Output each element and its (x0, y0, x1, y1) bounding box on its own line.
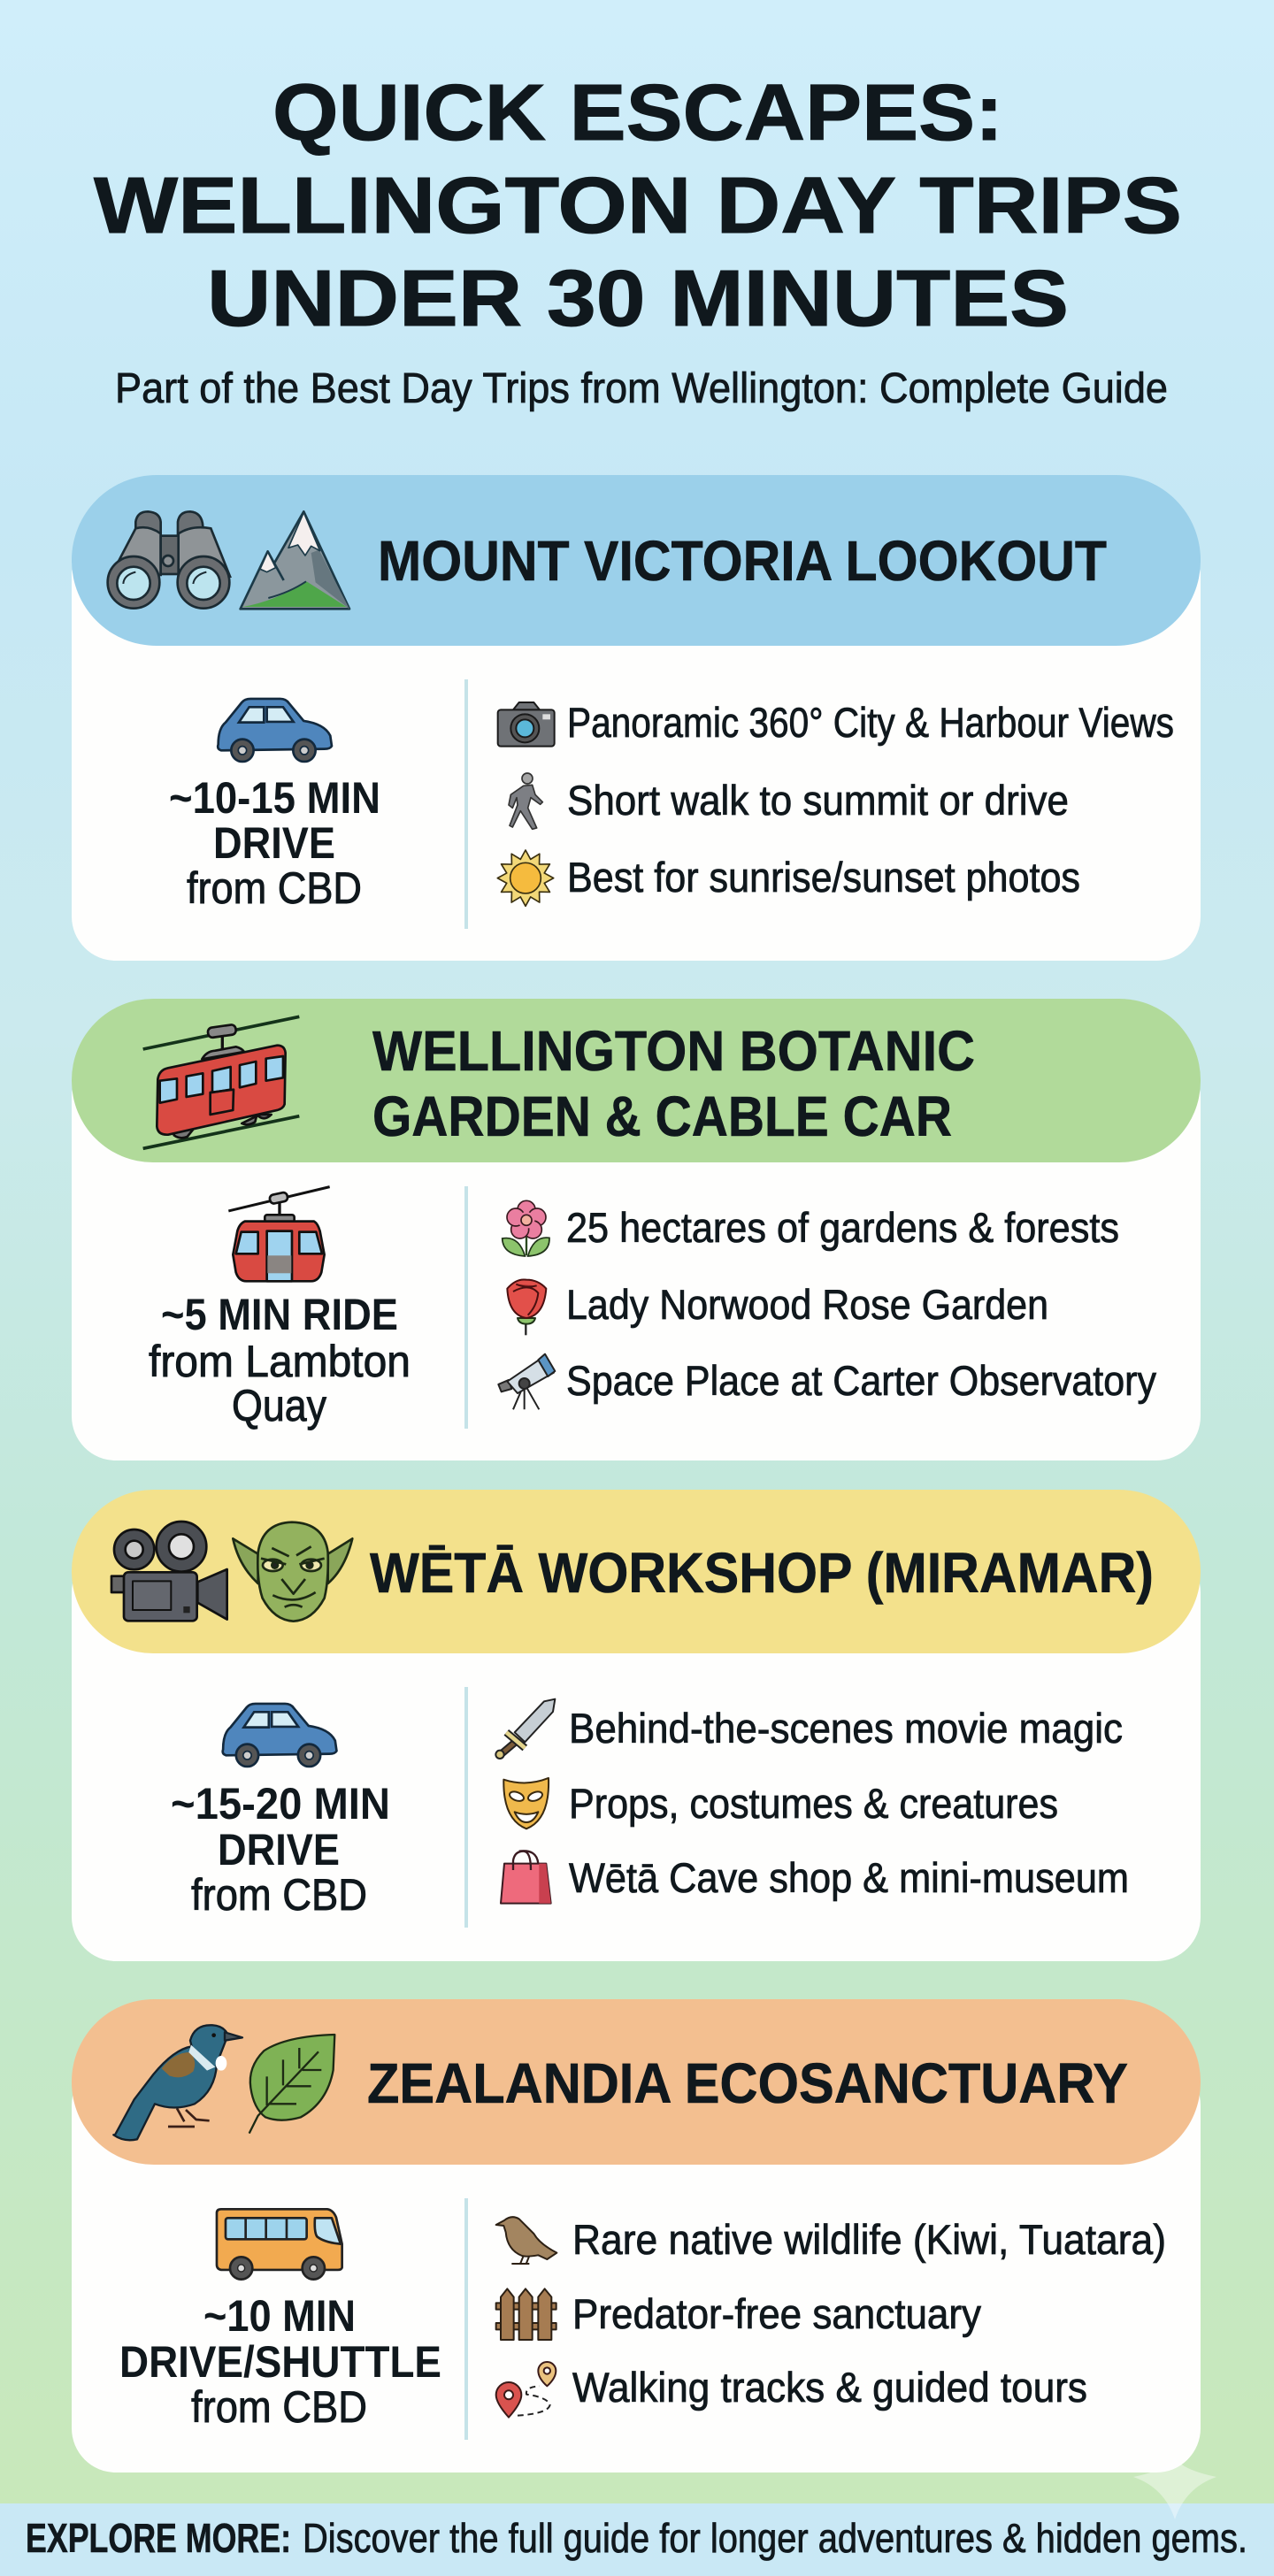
header band (72, 475, 1201, 646)
icon: binoculars (108, 511, 230, 609)
icon: route pins (496, 2362, 556, 2418)
card body (72, 1053, 1201, 1460)
icon: car (218, 699, 332, 762)
subtitle: Part of the Best Day Trips from Wellington: Complete Guide (115, 365, 1168, 412)
icon: car (223, 1704, 336, 1767)
feature text: Props, costumes & creatures (569, 1780, 1058, 1827)
panel: Wellington Botanic Garden & Cable Car (72, 999, 1201, 1460)
feature text: Wētā Cave shop & mini-museum (569, 1854, 1129, 1901)
icon: flower (503, 1200, 549, 1256)
icon: rose (507, 1279, 546, 1335)
travel time: from CBD (187, 863, 362, 913)
icon: leaf (249, 2035, 334, 2134)
travel time: DRIVE/SHUTTLE (119, 2337, 441, 2387)
icon: walker (509, 773, 542, 829)
travel time: from CBD (191, 1870, 367, 1920)
icon: sun (497, 850, 554, 906)
travel time: ~15-20 MIN (171, 1779, 390, 1828)
panel: Mount Victoria Lookout (72, 475, 1201, 961)
heading: ZEALANDIA ECOSANCTUARY (367, 2051, 1128, 2115)
travel time: ~10-15 MIN (169, 773, 380, 823)
feature text: 25 hectares of gardens & forests (566, 1204, 1119, 1251)
icon: cable car (143, 1016, 299, 1148)
travel time (171, 1779, 390, 1920)
feature text: Walking tracks & guided tours (572, 2364, 1087, 2411)
title (94, 69, 1182, 343)
heading: WELLINGTON BOTANIC (372, 1019, 975, 1083)
card body (72, 531, 1201, 961)
feature text: Panoramic 360° City & Harbour Views (567, 699, 1174, 746)
feature text: Predator-free sanctuary (572, 2290, 981, 2337)
feature text: Short walk to summit or drive (567, 777, 1069, 824)
feature text: Space Place at Carter Observatory (566, 1357, 1156, 1404)
feature text: Best for sunrise/sunset photos (567, 854, 1080, 901)
travel time: ~5 MIN RIDE (161, 1290, 398, 1339)
panel: Zealandia Ecosanctuary (72, 1999, 1201, 2472)
icon: gondola (228, 1187, 330, 1281)
icon: telescope (498, 1354, 555, 1409)
icon: sword (495, 1699, 555, 1759)
card body (72, 2061, 1201, 2472)
footer call to action: EXPLORE MORE: (26, 2515, 291, 2561)
title: UNDER 30 MINUTES (207, 255, 1069, 343)
feature text: Behind-the-scenes movie magic (569, 1705, 1123, 1752)
feature text: Rare native wildlife (Kiwi, Tuatara) (572, 2216, 1166, 2263)
title: QUICK ESCAPES: (272, 69, 1003, 157)
footer band (0, 2503, 1274, 2576)
card body (72, 1548, 1201, 1961)
icon: camera (498, 702, 555, 747)
heading (372, 1019, 975, 1148)
icon: film camera (111, 1522, 227, 1621)
icon: tui bird (113, 2025, 242, 2140)
icon: bus (217, 2209, 342, 2280)
icon: theatre mask (503, 1778, 549, 1828)
icon: kiwi bird (496, 2217, 556, 2264)
icon: shopping bag (501, 1851, 551, 1904)
icon: sparkle (1133, 2457, 1216, 2519)
header band (72, 1490, 1201, 1653)
travel time (119, 2291, 441, 2432)
travel time: ~10 MIN (203, 2291, 356, 2341)
travel time (149, 1290, 411, 1430)
travel time: DRIVE (213, 818, 335, 868)
icon: goblin (233, 1522, 352, 1622)
travel time: from Lambton (149, 1337, 411, 1386)
heading: GARDEN & CABLE CAR (372, 1085, 952, 1148)
icon: fence (496, 2288, 556, 2340)
feature text: Lady Norwood Rose Garden (566, 1281, 1048, 1328)
title: WELLINGTON DAY TRIPS (94, 162, 1182, 250)
header band (72, 999, 1201, 1162)
header band (72, 1999, 1201, 2165)
icon: mountain (241, 511, 349, 609)
travel time (169, 773, 380, 913)
travel time: DRIVE (218, 1825, 340, 1874)
heading: WĒTĀ WORKSHOP (MIRAMAR) (370, 1541, 1154, 1605)
travel time: from CBD (191, 2382, 367, 2432)
panel: Weta Workshop (72, 1490, 1201, 1961)
heading: MOUNT VICTORIA LOOKOUT (378, 529, 1107, 593)
travel time: Quay (232, 1381, 326, 1430)
